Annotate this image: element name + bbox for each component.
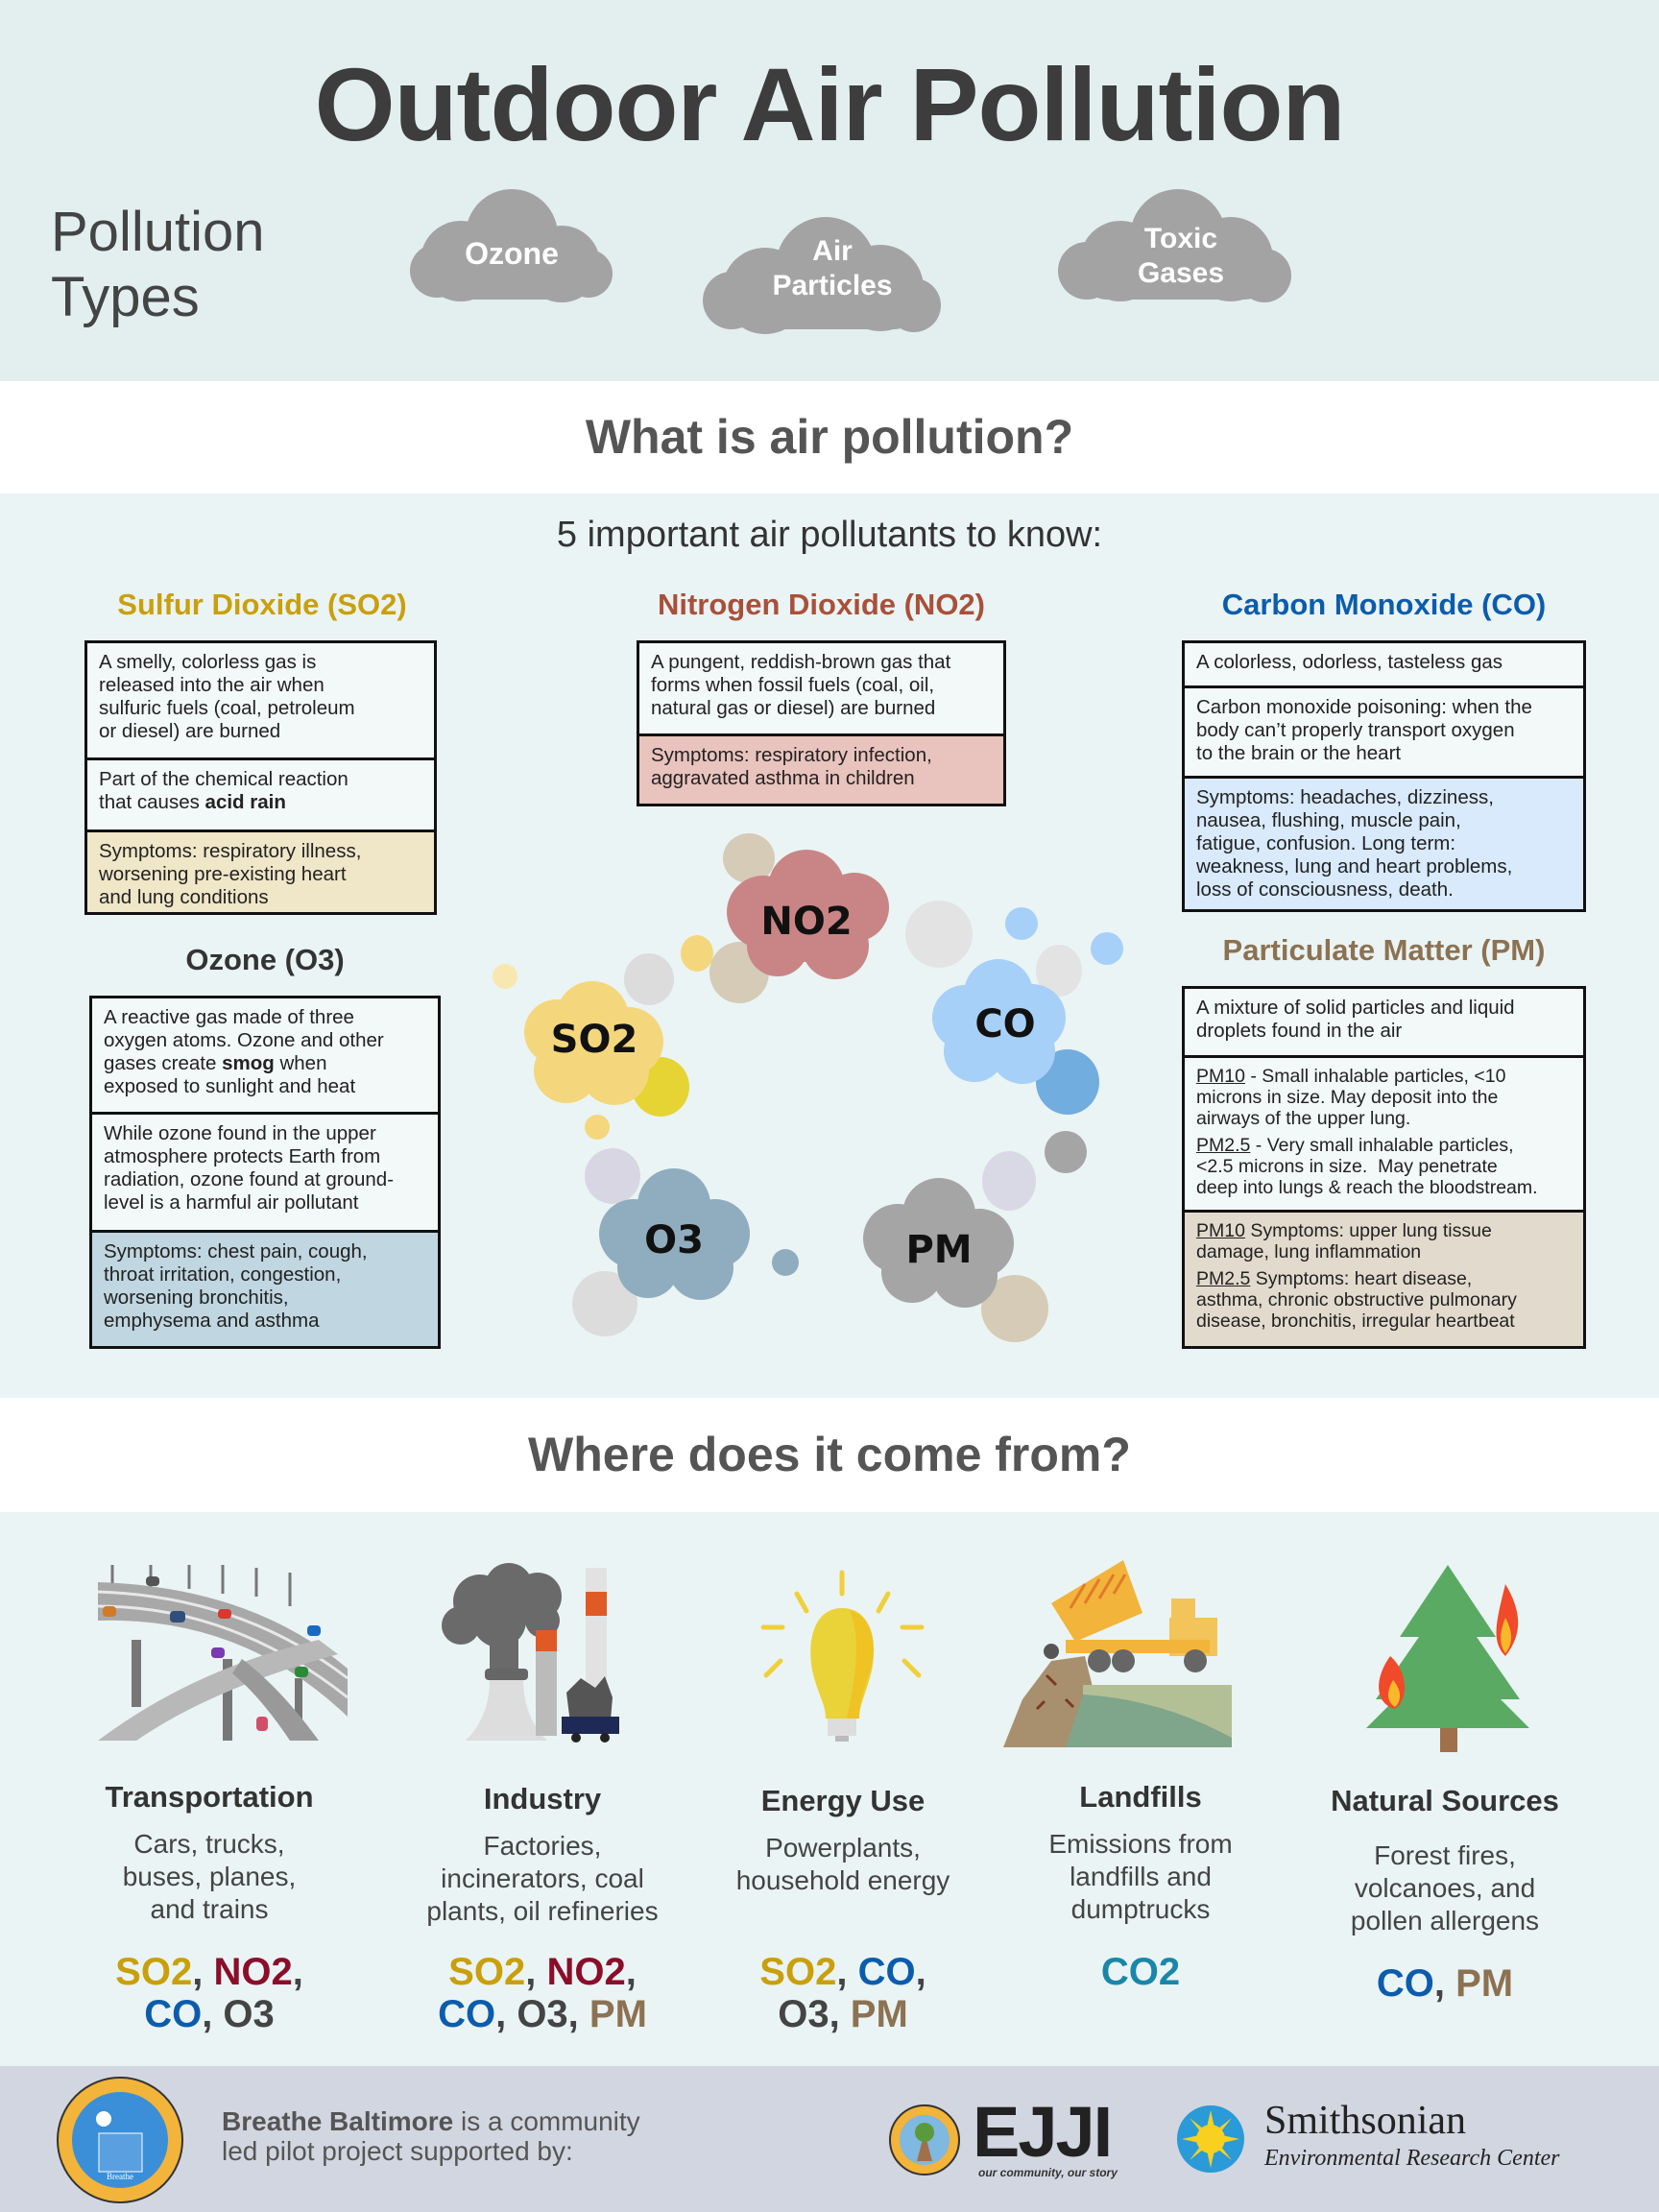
panel: particulate matter: <2.5 microns in size. May penetrate (1196, 1156, 1498, 1177)
panel: carbon monoxide: Carbon monoxide poisoning: when the (1196, 696, 1532, 718)
category: landfills: Emissions from (1048, 1829, 1233, 1859)
panel: ozone: throat irritation, congestion, (104, 1263, 341, 1286)
panel: carbon monoxide: A colorless, odorless, tasteless gas (1196, 651, 1503, 673)
heading band: what is air pollution (0, 381, 1659, 493)
category: energy use: O3, PM (778, 1993, 908, 2035)
heading band: what is air pollution: What is air pollution? (586, 410, 1073, 464)
panel: sulfur dioxide (84, 588, 437, 915)
panel: ozone: While ozone found in the upper (104, 1122, 376, 1144)
heading PM: Particulate Matter (PM) (1223, 933, 1545, 967)
cloud: O3: O3 (644, 1218, 704, 1262)
panel: sulfur dioxide: Part of the chemical reaction (99, 768, 349, 790)
panel: ozone: A reactive gas made of three (104, 1006, 354, 1028)
pollution types label: Types (51, 266, 200, 328)
category: industry: SO2, NO2, (448, 1951, 637, 1993)
panel: particulate matter: airways of the upper lung. PM2.5 - Very small inhalable particles, (1196, 1108, 1514, 1156)
panel: sulfur dioxide: released into the air when (99, 674, 325, 696)
panel: ozone: oxygen atoms. Ozone and other (104, 1029, 384, 1051)
icon: tree with fire (1366, 1565, 1529, 1752)
panel: particulate matter: disease, bronchitis, irregular heartbeat (1196, 1310, 1515, 1332)
small bubbles (493, 833, 1123, 1342)
panel: nitrogen dioxide (637, 588, 1006, 806)
footer text: Breathe Baltimore is a community (222, 2106, 640, 2136)
cloud: O3 (599, 1168, 750, 1300)
logo: breathe baltimore (57, 2077, 183, 2203)
cloud: CO: CO (974, 1002, 1036, 1046)
panel: sulfur dioxide: worsening pre-existing heart (99, 863, 347, 885)
chart: pollutant clouds (493, 833, 1123, 1342)
category: natural sources (1331, 1784, 1559, 2005)
category: industry: Factories, (484, 1831, 601, 1861)
top band (0, 0, 1659, 381)
panel: nitrogen dioxide: A pungent, reddish-brown gas that (651, 651, 950, 673)
panel: sulfur dioxide: and lung conditions (99, 886, 269, 908)
subheading: 5 important air pollutants to know: (557, 515, 1102, 555)
cloud: toxic gases: Gases (1138, 257, 1224, 289)
category: energy use: household energy (736, 1865, 950, 1895)
category: transportation: and trains (151, 1894, 268, 1924)
icon: highway (98, 1565, 348, 1741)
heading band: where does it come from (0, 1398, 1659, 1512)
logo: EJJI: our community, our story (978, 2166, 1118, 2179)
category: natural sources: CO, PM (1377, 1962, 1513, 2005)
panel: sulfur dioxide: sulfuric fuels (coal, petroleum (99, 697, 355, 719)
cloud: ozone: Ozone (465, 236, 559, 271)
panel: particulate matter: asthma, chronic obstructive pulmonary (1196, 1289, 1517, 1310)
logo: smithsonian: Environmental Research Center (1264, 2146, 1559, 2171)
cloud: air particles: Air (812, 235, 853, 267)
cloud: toxic gases: Toxic (1144, 223, 1217, 254)
panel: carbon monoxide: body can’t properly transport oxygen (1196, 719, 1515, 741)
cloud: air particles (703, 217, 941, 334)
pollution types label: Pollution (51, 201, 264, 263)
panel: sulfur dioxide: Symptoms: respiratory illness, (99, 840, 361, 862)
cloud: NO2 (727, 850, 889, 979)
panel: carbon monoxide: fatigue, confusion. Long term: (1196, 832, 1455, 854)
panel: ozone (89, 943, 441, 1349)
panel: carbon monoxide (1182, 588, 1586, 912)
panel: particulate matter (1182, 933, 1586, 1349)
panel: carbon monoxide: Symptoms: headaches, dizziness, (1196, 786, 1494, 808)
cloud: PM (863, 1178, 1014, 1308)
category: landfills: landfills and (1070, 1862, 1212, 1891)
footer text: led pilot project supported by: (222, 2136, 573, 2166)
panel: sulfur dioxide: that causes acid rain (99, 791, 286, 813)
category: landfills: CO2 (1101, 1951, 1180, 1993)
category: transportation: CO, O3 (144, 1993, 275, 2035)
category: transportation: buses, planes, (123, 1862, 296, 1891)
panel: particulate matter: PM10 Symptoms: upper lung tissue (1196, 1220, 1492, 1241)
cloud: NO2: NO2 (760, 900, 853, 944)
panel: ozone: level is a harmful air pollutant (104, 1191, 359, 1214)
heading band: where does it come from: Where does it come from? (528, 1428, 1131, 1481)
panel: ozone: radiation, ozone found at ground- (104, 1168, 394, 1190)
category: landfills: Landfills (1079, 1780, 1202, 1814)
heading SO2: Sulfur Dioxide (SO2) (117, 588, 407, 621)
title: Outdoor Air Pollution (315, 46, 1344, 162)
category: industry (426, 1782, 659, 2035)
category: industry: incinerators, coal (441, 1863, 644, 1893)
panel: nitrogen dioxide: Symptoms: respiratory infection, (651, 744, 932, 766)
panel: nitrogen dioxide: natural gas or diesel) are burned (651, 697, 935, 719)
pollution types label (51, 201, 264, 328)
panel: carbon monoxide: loss of consciousness, death. (1196, 878, 1454, 901)
panel: sulfur dioxide: A smelly, colorless gas is (99, 651, 316, 673)
logo: smithsonian (1177, 2099, 1559, 2173)
category: energy use: Powerplants, (765, 1833, 921, 1863)
cloud: air particles: Particles (772, 270, 893, 301)
category: transportation: Transportation (105, 1780, 313, 1814)
cloud: toxic gases (1058, 189, 1291, 302)
logo: EJJI (889, 2092, 1118, 2179)
logo: smithsonian: Smithsonian (1264, 2099, 1466, 2143)
footer text (222, 2106, 640, 2166)
panel: particulate matter: microns in size. May deposit into the (1196, 1087, 1498, 1108)
panel: particulate matter: droplets found in the air (1196, 1020, 1402, 1042)
icon: light bulb (760, 1571, 924, 1742)
logo: breathe baltimore: Breathe (107, 2172, 133, 2181)
category: industry: CO, O3, PM (438, 1993, 647, 2035)
panel: ozone: worsening bronchitis, (104, 1286, 289, 1309)
panel: nitrogen dioxide: aggravated asthma in children (651, 767, 915, 789)
heading O3: Ozone (O3) (185, 943, 345, 976)
panel: sulfur dioxide: or diesel) are burned (99, 720, 280, 742)
heading NO2: Nitrogen Dioxide (NO2) (658, 588, 985, 621)
panel: ozone: emphysema and asthma (104, 1310, 319, 1332)
panel: carbon monoxide: weakness, lung and heart problems, (1196, 855, 1512, 878)
category: transportation: Cars, trucks, (133, 1829, 285, 1859)
category: transportation (105, 1780, 313, 2035)
category: natural sources: Forest fires, (1374, 1840, 1516, 1870)
footer (0, 2066, 1659, 2212)
panel: ozone: exposed to sunlight and heat (104, 1075, 355, 1097)
cloud: CO (932, 959, 1066, 1084)
icon: landfill truck (1003, 1560, 1232, 1747)
panel: particulate matter: deep into lungs & reach the bloodstream. (1196, 1177, 1538, 1198)
panel: particulate matter: PM10 - Small inhalable particles, <10 (1196, 1066, 1505, 1087)
panel: carbon monoxide: nausea, flushing, muscle pain, (1196, 809, 1461, 831)
panel: nitrogen dioxide: forms when fossil fuels (coal, oil, (651, 674, 934, 696)
category: natural sources: Natural Sources (1331, 1784, 1559, 1817)
category: natural sources: pollen allergens (1351, 1906, 1539, 1936)
icon: industry (442, 1563, 619, 1743)
category: transportation: SO2, NO2, (115, 1951, 303, 1993)
heading CO: Carbon Monoxide (CO) (1222, 588, 1546, 621)
panel: carbon monoxide: to the brain or the heart (1196, 742, 1401, 764)
panel: particulate matter: A mixture of solid particles and liquid (1196, 997, 1515, 1019)
cloud: SO2: SO2 (551, 1018, 637, 1062)
panel: particulate matter: damage, lung inflammation PM2.5 Symptoms: heart disease, (1196, 1241, 1472, 1289)
category: energy use (736, 1784, 950, 2035)
panel: ozone: atmosphere protects Earth from (104, 1145, 380, 1167)
panel: ozone: gases create smog when (104, 1052, 326, 1074)
category: landfills (1048, 1780, 1233, 1993)
panel: ozone: Symptoms: chest pain, cough, (104, 1240, 368, 1262)
cloud: SO2 (524, 981, 663, 1105)
category: natural sources: volcanoes, and (1355, 1873, 1535, 1903)
cloud: ozone (410, 189, 613, 302)
category: energy use: SO2, CO, (759, 1951, 926, 1993)
category: landfills: dumptrucks (1071, 1894, 1210, 1924)
category: industry: Industry (484, 1782, 601, 1815)
category: industry: plants, oil refineries (426, 1896, 659, 1926)
cloud: PM: PM (905, 1228, 973, 1272)
logo: EJJI: EJJI (973, 2092, 1111, 2172)
category: energy use: Energy Use (761, 1784, 925, 1817)
